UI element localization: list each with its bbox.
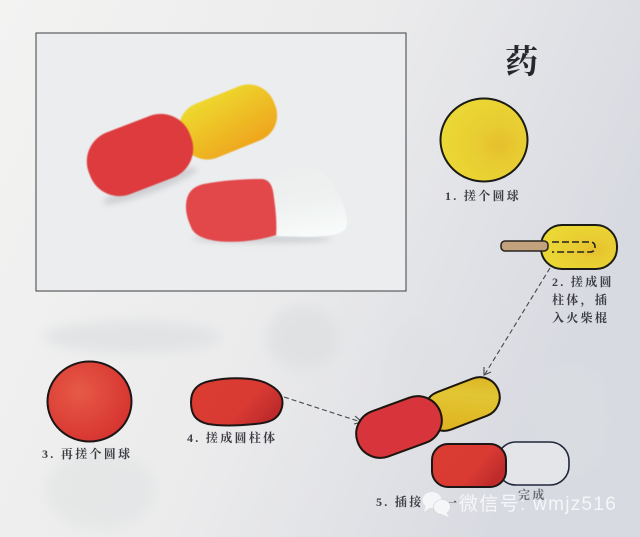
matchstick: [501, 241, 548, 251]
step 2 label: 2. 搓成圆: [552, 274, 614, 289]
red half: [349, 389, 449, 465]
assembled yellow and red capsule: [349, 371, 506, 465]
shadow under capsules: [101, 162, 332, 243]
panel: photo of clay capsules: [36, 33, 406, 291]
icon: yellow ball: [440, 98, 528, 182]
step 5 label: [376, 487, 547, 510]
step 4 label: 4. 搓成圆柱体: [187, 430, 277, 445]
step 1 label: 1. 搓个圆球: [445, 188, 521, 203]
faint show-through shapes: [44, 306, 610, 530]
white half: [497, 442, 569, 485]
step 5 label: 5. 插接: [376, 494, 424, 509]
step 2 label: 入火柴棍: [552, 310, 609, 325]
cylinder: [541, 225, 617, 269]
arrow: step 2 to step 5: [484, 268, 550, 375]
photo background: [36, 33, 406, 291]
step 3 label: 3. 再搓个圆球: [42, 446, 132, 461]
capsule: white half: [268, 165, 347, 237]
watermark text: 微信号: wmjz516: [459, 493, 617, 515]
step 5 label: 一: [445, 496, 459, 510]
icon: red cylinder: [191, 378, 282, 426]
watermark: WeChat icon: [422, 492, 450, 517]
capsule: yellow half: [171, 76, 285, 168]
step 2 label: [552, 274, 614, 325]
hidden stick dashes: [552, 242, 595, 252]
icon: yellow cylinder with matchstick: [501, 225, 617, 269]
yellow half: [418, 371, 506, 437]
icon: red ball: [48, 362, 132, 442]
red half: [432, 444, 506, 487]
capsule: red half: [78, 105, 202, 205]
capsule: red short half: [186, 179, 276, 242]
assembled red and white capsule: [432, 442, 569, 487]
step 5 label: 完成: [518, 487, 547, 502]
title: 药: [505, 36, 538, 83]
step 2 label: 柱体，插: [552, 292, 609, 307]
arrow: step 4 to step 5: [284, 397, 362, 424]
